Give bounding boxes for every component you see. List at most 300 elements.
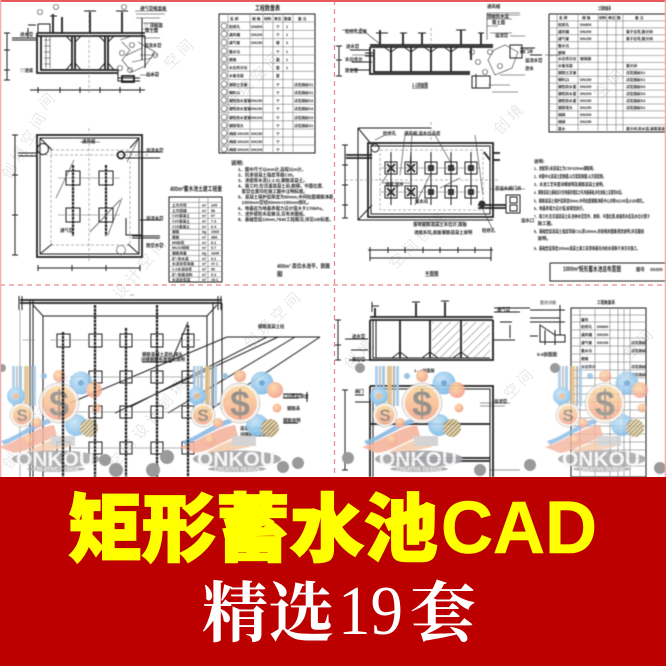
small detail section: II-II剖面图 bbox=[537, 351, 557, 358]
table: engineering quantities: 钢制三叉管 bbox=[229, 82, 248, 87]
table: 400 m3 civil quantities: m³ bbox=[202, 220, 207, 224]
table: engineering quantities: 集水坑 bbox=[558, 43, 569, 48]
table: 400 m3 civil quantities: m² bbox=[202, 257, 207, 261]
text block: notes for 400 m3 tank: 7、池外壁防水层做法,见有关图纸。 bbox=[238, 210, 308, 218]
table: engineering quantities: 详见国标S3 bbox=[294, 115, 313, 120]
table: engineering quantities: 套 bbox=[276, 73, 280, 78]
section drawing: 进水管 bbox=[20, 31, 34, 38]
table: engineering quantities: 详见国标S3 bbox=[294, 98, 313, 103]
leader lines: 详细钢筋布置图见说明 bbox=[141, 356, 186, 363]
table: engineering quantities: 个 bbox=[276, 98, 280, 103]
table: engineering quantities: 通气管 bbox=[558, 36, 569, 41]
table: 400 m3 civil quantities: m² bbox=[202, 278, 207, 282]
table: engineering quantities: 钢性防水套 bbox=[558, 91, 577, 96]
column grid boxes bbox=[23, 334, 205, 454]
table: engineering quantities: 水位传示仪 bbox=[229, 65, 248, 70]
table: engineering quantities: 详见国标S3 bbox=[626, 91, 645, 96]
panel: 400 m3 tank drawing bbox=[4, 3, 334, 282]
section drawing: 进水管 bbox=[352, 333, 366, 340]
text block: notes for 1000 m3 tank: 1、池壁厚1米混凝土为C30×100mm钢筋网。 bbox=[534, 165, 596, 172]
plan drawing: 溢流水管 bbox=[146, 147, 164, 154]
plan drawing: 检修孔 bbox=[383, 130, 397, 137]
section drawing: 通气管帽盖板 bbox=[140, 5, 167, 12]
table: 工程数量表 bbox=[597, 299, 615, 306]
subtitle: 精 bbox=[202, 560, 268, 655]
logo: watermark 3: CREATIVE DESIGN bbox=[396, 467, 442, 473]
table: 400 m3 civil quantities: m² bbox=[202, 262, 207, 266]
table: engineering quantities: DN150 bbox=[580, 37, 591, 41]
table: 400 m3 civil quantities: m³ bbox=[202, 209, 207, 213]
table: engineering quantities: 个 bbox=[276, 147, 280, 152]
plan drawing: 通风帽,溢水位高度 bbox=[404, 130, 441, 137]
table: 400 m3 civil quantities: 5.3 bbox=[211, 273, 216, 277]
table: engineering quantities: 数量 bbox=[284, 16, 292, 21]
watermark: diagonal text: 设 计 空 间 bbox=[110, 236, 170, 303]
table: 400 m3 civil quantities: m³ bbox=[202, 241, 207, 245]
table: 400 m3 civil quantities: C20混凝土 bbox=[172, 218, 190, 224]
table: engineering quantities: DN100 bbox=[251, 148, 262, 152]
plan drawing: 平面图 bbox=[425, 271, 439, 277]
table: engineering quantities: 蓝水 bbox=[558, 126, 566, 131]
table: engineering quantities: 钢制三叉管 bbox=[558, 70, 577, 75]
table: 400 m3 civil quantities: 土方开挖 bbox=[172, 202, 187, 208]
table: engineering quantities: DN150 bbox=[251, 132, 262, 136]
subtitle bbox=[202, 560, 476, 655]
watermark: diagonal text bbox=[0, 37, 657, 473]
table: engineering quantities: 材料 bbox=[264, 16, 272, 21]
table: engineering quantities: 集水坑 bbox=[229, 49, 240, 54]
table: 通风帽 bbox=[581, 332, 592, 337]
text block: notes for 400 m3 tank bbox=[231, 159, 334, 223]
table: engineering quantities: 详见国标S1 bbox=[294, 123, 313, 128]
table: engineering quantities: DN100 bbox=[251, 116, 262, 120]
watermark: diagonal text: 创 bbox=[291, 175, 313, 198]
plan drawing: 落地钢筋混凝土水位计,底板 bbox=[413, 221, 468, 228]
plan drawing: 放空水管 bbox=[146, 242, 164, 249]
section drawing: 1—1剖面图 bbox=[414, 367, 434, 373]
table: 集水坑 bbox=[581, 348, 592, 353]
table: engineering quantities: 个 bbox=[276, 115, 280, 120]
logo: watermark 4: S bbox=[562, 406, 574, 425]
table: engineering quantities: DN200 bbox=[580, 85, 591, 89]
logo: watermark 1: ONKOU bbox=[16, 449, 94, 471]
table: engineering quantities: 水管吊架 bbox=[558, 63, 573, 68]
table: engineering quantities: 名 称 bbox=[230, 16, 239, 21]
table: DN150 bbox=[597, 341, 608, 345]
section drawing bbox=[4, 4, 167, 95]
table: 400 m3 civil quantities: C30混凝土 bbox=[172, 213, 190, 218]
side detail labels bbox=[240, 392, 309, 438]
logo: watermark 1: S bbox=[16, 406, 28, 425]
table: engineering quantities: 置于住宅,数计间 bbox=[626, 29, 653, 34]
logo: watermark 4: CREATIVE DESIGN bbox=[579, 467, 625, 473]
side detail labels: 混凝土保护层厚度 bbox=[240, 425, 276, 432]
table: 400 m3 civil quantities: 56 bbox=[211, 209, 215, 213]
table: 400 m3 civil quantities: 土方回填 bbox=[172, 208, 187, 213]
table: engineering quantities: 单位 bbox=[608, 15, 616, 20]
table: engineering quantities: 详见国标S3 bbox=[626, 98, 645, 103]
table: 400 m3 civil quantities: M5砂浆 bbox=[172, 240, 185, 245]
table: engineering quantities: 套 bbox=[276, 65, 280, 70]
title box: 1000 m3 layout bbox=[550, 263, 666, 281]
table: engineering quantities: 1 bbox=[286, 33, 288, 37]
plan drawing: 检修孔 bbox=[482, 227, 496, 234]
table: engineering quantities: 个 bbox=[276, 82, 280, 87]
table: engineering quantities: 数 bbox=[617, 15, 621, 20]
table: engineering quantities: 闸阀 DN150 bbox=[229, 131, 249, 136]
table: 400 m3 civil quantities: 8.1 bbox=[211, 241, 216, 245]
table: 400 m3 civil quantities: 47.1 bbox=[211, 262, 218, 266]
table: 400 m3 civil quantities: 矿/ 防水层 bbox=[172, 256, 189, 261]
text block: notes for 400 m3 tank: 说明: bbox=[231, 159, 244, 167]
watermark: diagonal text: 创 境 空 间 设 计 bbox=[0, 371, 77, 472]
table: engineering quantities: DN150 bbox=[251, 41, 262, 45]
table: engineering quantities: 备 注 bbox=[635, 15, 644, 20]
table: engineering quantities: 1 bbox=[286, 50, 288, 54]
table: 400 m3 civil quantities: m² bbox=[202, 268, 207, 272]
table: 400 m3 civil quantities: MU10砖砌 bbox=[172, 245, 190, 250]
section drawing: 通风帽 bbox=[487, 3, 501, 10]
table: engineering quantities: 闸阀 bbox=[558, 112, 566, 117]
table: 详见国标 bbox=[631, 364, 646, 369]
subtitle: 套 bbox=[410, 560, 476, 655]
table: 400 m3 civil quantities: m² bbox=[202, 273, 207, 277]
table: engineering quantities: 规 格 bbox=[252, 16, 261, 21]
side detail labels: 钢筋表 bbox=[287, 405, 301, 412]
table: engineering quantities: 水位传示仪 bbox=[558, 56, 577, 61]
table: engineering quantities: 个 bbox=[276, 90, 280, 95]
text block: notes for 400 m3 tank: 2、抗渗混凝土强度等级C30。 bbox=[238, 172, 297, 178]
small detail section: 管径详图 bbox=[540, 299, 556, 305]
watermark: diagonal text: 创 境 空 间 bbox=[240, 289, 304, 353]
watermark: diagonal text: 空 间 bbox=[161, 37, 197, 73]
plan drawing: 溢流水管 bbox=[146, 215, 164, 222]
watermark: diagonal text: 创 境 空 间 bbox=[220, 49, 284, 113]
table: engineering quantities: DN150 bbox=[580, 120, 591, 124]
table: engineering quantities: DN200 bbox=[580, 30, 591, 34]
table: engineering quantities: 详见国标S1 bbox=[294, 82, 313, 87]
table: 400 m3 civil quantities: m³ bbox=[202, 246, 207, 250]
section drawing: 顶板防水层 bbox=[487, 13, 510, 20]
section drawing: 放空管 bbox=[345, 67, 359, 74]
lower plan: 溢流管 bbox=[494, 398, 508, 405]
text block: notes for 400 m3 tank: 3、池壁厚水泥(1:2.5),钢筋混凝土。 bbox=[238, 177, 307, 184]
table: engineering quantities bbox=[549, 5, 666, 132]
table: engineering quantities: 检修孔 bbox=[229, 24, 240, 29]
text block: notes for 1000 m3 tank: 说明: bbox=[534, 158, 545, 165]
section drawing bbox=[336, 3, 560, 92]
section drawing: 1-1剖面图 bbox=[412, 82, 428, 89]
plan drawing: 通风帽 bbox=[82, 138, 96, 145]
table: 400 m3 civil quantities: 400m³蓄水池土建工程量 bbox=[170, 185, 222, 193]
table: 400 m3 civil quantities: 6.4 bbox=[211, 225, 217, 229]
lower plan bbox=[342, 386, 520, 477]
logo: watermark 2: ONKOU bbox=[197, 449, 275, 471]
table: engineering quantities: DN800 bbox=[251, 25, 262, 29]
caption: 400 m3 plan and section: 400m³ 高位水池平、剖面 bbox=[277, 262, 330, 270]
text block: notes for 400 m3 tank: 6、地基应为地基承载力设计值大于170kPa。 bbox=[238, 205, 326, 212]
table: engineering quantities: 名 称 bbox=[559, 15, 568, 20]
table: engineering quantities: 闸阀 DN100 bbox=[229, 147, 249, 152]
table: engineering quantities: 置于住宅,数计间 bbox=[626, 36, 653, 41]
logo: watermark 2: $ bbox=[230, 383, 250, 424]
table: 400 m3 civil quantities: 1:2水泥砂浆 bbox=[172, 266, 192, 272]
table: engineering quantities: 详见国标S1 bbox=[626, 105, 645, 110]
title bbox=[68, 486, 597, 571]
table: engineering quantities: 通风帽 bbox=[558, 29, 569, 34]
table: engineering quantities: DN200 bbox=[251, 33, 262, 37]
logo: watermark 2: CREATIVE DESIGN bbox=[214, 467, 260, 473]
table: 400 m3 civil quantities: 模板 bbox=[172, 234, 180, 240]
table: 400 m3 civil quantities: m³ bbox=[202, 225, 207, 229]
table: 400 m3 civil quantities: 9.7 bbox=[211, 246, 216, 250]
section drawing: 溢流水管 bbox=[144, 42, 162, 49]
watermark: diagonal text: 空 间 bbox=[591, 67, 627, 103]
leader lines bbox=[70, 322, 320, 413]
table: engineering quantities: 闸阀 bbox=[558, 119, 566, 124]
plan drawing: 池底水坑,底板钢筋混凝土说明 bbox=[414, 229, 473, 236]
table: engineering quantities: 通气管 bbox=[229, 40, 240, 45]
logo: watermark 3: $ bbox=[412, 383, 432, 424]
section drawing: 检修孔盖板 bbox=[345, 28, 368, 35]
plan drawing: 溢水口 bbox=[521, 217, 534, 224]
logo: watermark 4 bbox=[545, 366, 648, 473]
watermark: diagonal text: 创 境 bbox=[490, 101, 527, 138]
section drawing: 通气管 bbox=[497, 306, 511, 313]
table: 400 m3 civil quantities: kg bbox=[202, 252, 206, 256]
leader lines: 钢筋混凝土梁柱,接头 bbox=[142, 351, 183, 358]
table: engineering quantities: 个 bbox=[276, 49, 280, 54]
table: engineering quantities: 个 bbox=[276, 123, 280, 128]
table: engineering quantities: 爬梯 bbox=[558, 50, 566, 55]
table: engineering quantities: 检修孔 bbox=[558, 22, 569, 27]
lower plan: 阀门 bbox=[355, 388, 364, 395]
table bbox=[571, 299, 646, 477]
rebar columns over logos bbox=[63, 305, 188, 477]
section drawing: ▽池底 bbox=[20, 67, 34, 74]
section drawing: 泄水 bbox=[525, 65, 534, 72]
table: 400 m3 civil quantities: 钢筋 bbox=[172, 229, 180, 234]
section drawing: ▽ 顶板面 bbox=[144, 22, 163, 29]
text block: notes for 400 m3 tank: 1000mm管径50mm×150mm绑扎。 bbox=[238, 199, 312, 206]
table: engineering quantities: 钢性防水套 bbox=[558, 84, 577, 89]
table: 400 m3 civil quantities bbox=[169, 185, 222, 282]
text block: notes for 1000 m3 tank: 说明。 bbox=[534, 235, 551, 242]
plan drawing: 通气管 bbox=[60, 227, 74, 234]
table: engineering quantities: 钢性防水套 bbox=[558, 98, 577, 103]
table: 详见国标 bbox=[631, 348, 646, 353]
text block: notes for 1000 m3 tank: 施工图。 bbox=[534, 220, 555, 227]
text block: notes for 400 m3 tank: 8、基础垫层10mm,7840工程概况,详见GB标准。 bbox=[238, 216, 333, 223]
section drawing: 覆土面 bbox=[492, 19, 506, 26]
section drawing: 溢流水管 bbox=[525, 57, 543, 64]
title: CAD bbox=[441, 486, 597, 569]
side detail labels: 详细配筋及说明 bbox=[240, 431, 271, 438]
plan drawing bbox=[342, 122, 534, 277]
table: engineering quantities: 玻璃钢 bbox=[580, 56, 591, 61]
subtitle: 19 bbox=[338, 573, 403, 650]
section drawing: 溢流管 bbox=[495, 32, 509, 39]
title box: 1000 m3 layout: 1000m³矩形蓄水池总布置图 bbox=[563, 264, 621, 273]
logo: watermark 3 bbox=[362, 366, 465, 473]
table: engineering quantities: 1 bbox=[286, 58, 288, 62]
text block: notes for 400 m3 tank: 1、图中尺寸以mm计,高程以m计。 bbox=[238, 166, 306, 173]
section drawing: 放空管 bbox=[352, 356, 366, 363]
table: engineering quantities: 个 bbox=[276, 131, 280, 136]
leader lines: 钢筋混凝土柱 bbox=[258, 323, 285, 330]
side detail labels: 钢筋说明 bbox=[283, 417, 301, 424]
table: 详见国标 bbox=[631, 372, 646, 377]
logo: watermark 4: ONKOU bbox=[562, 449, 640, 471]
logo: watermark 1 bbox=[0, 366, 102, 473]
logo: watermark 1: $ bbox=[49, 383, 69, 424]
watermark: diagonal text: 空 间 bbox=[621, 327, 657, 363]
table: 爬梯 bbox=[581, 356, 589, 361]
table: 检修孔 bbox=[581, 324, 592, 329]
watermark: diagonal text: 创 境 bbox=[340, 336, 377, 373]
table: engineering quantities: 闸阀 DN100 bbox=[229, 139, 249, 144]
table: engineering quantities: 喇叭口 bbox=[558, 77, 569, 82]
title box: 1000 m3 layout: 图号 bbox=[636, 267, 645, 273]
table: engineering quantities: 个 bbox=[276, 24, 280, 29]
table: engineering quantities: DN150 bbox=[251, 107, 262, 111]
table: 水位传示 bbox=[581, 364, 596, 369]
watermark: diagonal text: 创 境 空 间 bbox=[0, 110, 50, 182]
plan drawing: 集水坑 bbox=[415, 198, 429, 205]
table: engineering quantities: 个 bbox=[276, 32, 280, 37]
table: engineering quantities: DN150 bbox=[251, 140, 262, 144]
logo: watermark 2 bbox=[180, 366, 283, 473]
table: engineering quantities: 爬梯 bbox=[229, 57, 237, 62]
section drawing: 覆土面 bbox=[145, 27, 159, 34]
table: engineering quantities: 喇叭口 bbox=[229, 90, 240, 95]
section drawing: 出水管 bbox=[146, 71, 160, 78]
table: engineering quantities bbox=[219, 3, 315, 153]
table: engineering quantities: 根 bbox=[276, 40, 280, 45]
table: engineering quantities: DN800 bbox=[580, 23, 591, 27]
text block: notes for 400 m3 tank: 4、施工时,在浇灌混凝土前,爬梯、平面位置, bbox=[238, 182, 323, 190]
watermark: diagonal text: 空 间 设 计 创 境 bbox=[104, 376, 189, 473]
panel: lower left detailed plan bbox=[19, 295, 320, 477]
table: 400 m3 civil quantities: 1560 bbox=[211, 230, 219, 234]
table: engineering quantities: 详见国标S1 bbox=[626, 70, 645, 75]
table: DN200 bbox=[597, 333, 608, 337]
plan drawing: 至溢水阀门井 bbox=[495, 185, 522, 192]
logo: watermark 3: ONKOU bbox=[379, 449, 457, 471]
table: engineering quantities: 个 bbox=[276, 139, 280, 144]
table: 编号 bbox=[581, 317, 589, 322]
table: 400 m3 civil quantities: 1840 bbox=[211, 252, 219, 256]
table: engineering quantities: DN150 bbox=[580, 99, 591, 103]
table: 400 m3 civil quantities: 矿/ 防腐涂料 bbox=[172, 272, 193, 277]
table: 400 m3 civil quantities: 水泥砂浆层 bbox=[172, 277, 191, 282]
table: engineering quantities: 钢性防水套管 bbox=[229, 115, 251, 120]
table: 400 m3 civil quantities: kg bbox=[202, 230, 206, 234]
text block: notes for 1000 m3 tank: 3、水池工艺布置详细说明及钢筋混凝土说明。 bbox=[534, 181, 606, 188]
title box: 1000 m3 layout: S0200 bbox=[650, 267, 663, 272]
table: engineering quantities: 置计间 bbox=[626, 63, 637, 68]
table: engineering quantities: 1 bbox=[286, 66, 288, 70]
table: engineering quantities: 详见国标S3 bbox=[626, 84, 645, 89]
table: 通气管 bbox=[581, 340, 592, 345]
logo: watermark 4: $ bbox=[595, 383, 615, 424]
text block: notes for 1000 m3 tank: 2、本图中以混凝土配筋图,以方案配筋图,以方案配筋。 bbox=[534, 173, 606, 180]
table: engineering quantities: 通风帽 bbox=[229, 32, 240, 37]
table: 400 m3 civil quantities: 水泥砂浆抹面 bbox=[172, 261, 194, 266]
watermark: diagonal text: 空 间 创 境 bbox=[385, 209, 449, 273]
table: engineering quantities: 3 bbox=[286, 41, 288, 45]
table: engineering quantities: DN200 bbox=[580, 113, 591, 117]
section drawing: 阀门井 bbox=[520, 48, 534, 55]
caption: 400 m3 plan and section bbox=[277, 262, 330, 278]
table: 400 m3 civil quantities: 90 bbox=[211, 268, 215, 272]
table: 400 m3 civil quantities: m³ bbox=[202, 214, 207, 218]
table: 400 m3 civil quantities: 7.3 bbox=[211, 220, 216, 224]
table: 400 m3 civil quantities: 钢筋用量 bbox=[172, 250, 187, 256]
text block: notes for 400 m3 tank: 套管位置均在施工图中注明标准。 bbox=[238, 188, 308, 195]
watermark: diagonal text: 空 间 bbox=[501, 367, 537, 403]
table: engineering quantities: 钢性防水套管 bbox=[229, 98, 251, 103]
table: engineering quantities: DN150 bbox=[251, 99, 262, 103]
table: DN800 bbox=[597, 325, 608, 329]
table: engineering quantities: 详见国标S1 bbox=[626, 77, 645, 82]
table: engineering quantities: 套 bbox=[276, 57, 280, 62]
table: engineering quantities: 备 注 bbox=[298, 16, 307, 21]
panel: 1000 m3 tank drawing bbox=[336, 3, 666, 281]
section drawing bbox=[335, 301, 530, 373]
table: 400 m3 civil quantities: 145 bbox=[211, 204, 217, 208]
table: engineering quantities: 1 bbox=[286, 25, 288, 29]
section drawing: 进水管 bbox=[346, 43, 360, 50]
panel: lower right section and table bbox=[335, 299, 646, 477]
table: 400 m3 civil quantities: C15混凝土 bbox=[172, 224, 190, 229]
logo: watermark 2: S bbox=[197, 406, 209, 425]
table: engineering quantities: 水管吊架 bbox=[229, 73, 244, 78]
table: 400 m3 civil quantities: m² bbox=[202, 236, 207, 240]
table: engineering quantities: 详见国标S3 bbox=[294, 106, 313, 111]
table: 400 m3 civil quantities: 9.1 bbox=[211, 257, 216, 261]
logo: watermark 1: CREATIVE DESIGN bbox=[33, 467, 79, 473]
subtitle: 选 bbox=[268, 560, 334, 655]
table: 400 m3 civil quantities: 18.1 bbox=[211, 278, 218, 282]
plan drawing bbox=[12, 128, 164, 271]
logo: watermark 3: S bbox=[379, 406, 391, 425]
watermark: diagonal text: 间 bbox=[36, 90, 58, 113]
caption: 400 m3 plan and section: 图 bbox=[277, 271, 283, 278]
banner: red background bbox=[0, 477, 666, 666]
title: 矩形蓄水池 bbox=[68, 488, 438, 571]
table: engineering quantities: 钢制弯头 bbox=[229, 123, 244, 128]
table: engineering quantities: 材料 bbox=[599, 15, 607, 20]
table: engineering quantities: 详见国标S1 bbox=[294, 90, 313, 95]
table: engineering quantities: 个 bbox=[276, 106, 280, 111]
text block: notes for 1000 m3 tank: 6、地基承载力设计值,按规范执行。 bbox=[534, 205, 586, 212]
table: engineering quantities: 工程数量表 bbox=[598, 5, 611, 12]
plan drawing: 通风,溢水 bbox=[385, 181, 404, 188]
text block: notes for 1000 m3 tank bbox=[534, 158, 650, 252]
text block: notes for 400 m3 tank: 5、混凝土保护层厚度为50mm,中间柱面钢筋净距 bbox=[238, 194, 334, 200]
table: engineering quantities: DN150 bbox=[580, 78, 591, 82]
table: engineering quantities: DN150 bbox=[580, 106, 591, 110]
section drawing: 水位传示 bbox=[345, 56, 363, 63]
small detail section bbox=[530, 299, 565, 358]
table: engineering quantities: 工程数量表 bbox=[255, 3, 280, 12]
table: 400 m3 civil quantities: m³ bbox=[202, 204, 207, 208]
table: engineering quantities: DN200 bbox=[580, 92, 591, 96]
table: 400 m3 civil quantities: 388 bbox=[211, 236, 217, 240]
table: engineering quantities: 钢制弯头 bbox=[558, 105, 573, 110]
table: engineering quantities: 规 格 bbox=[582, 15, 591, 20]
